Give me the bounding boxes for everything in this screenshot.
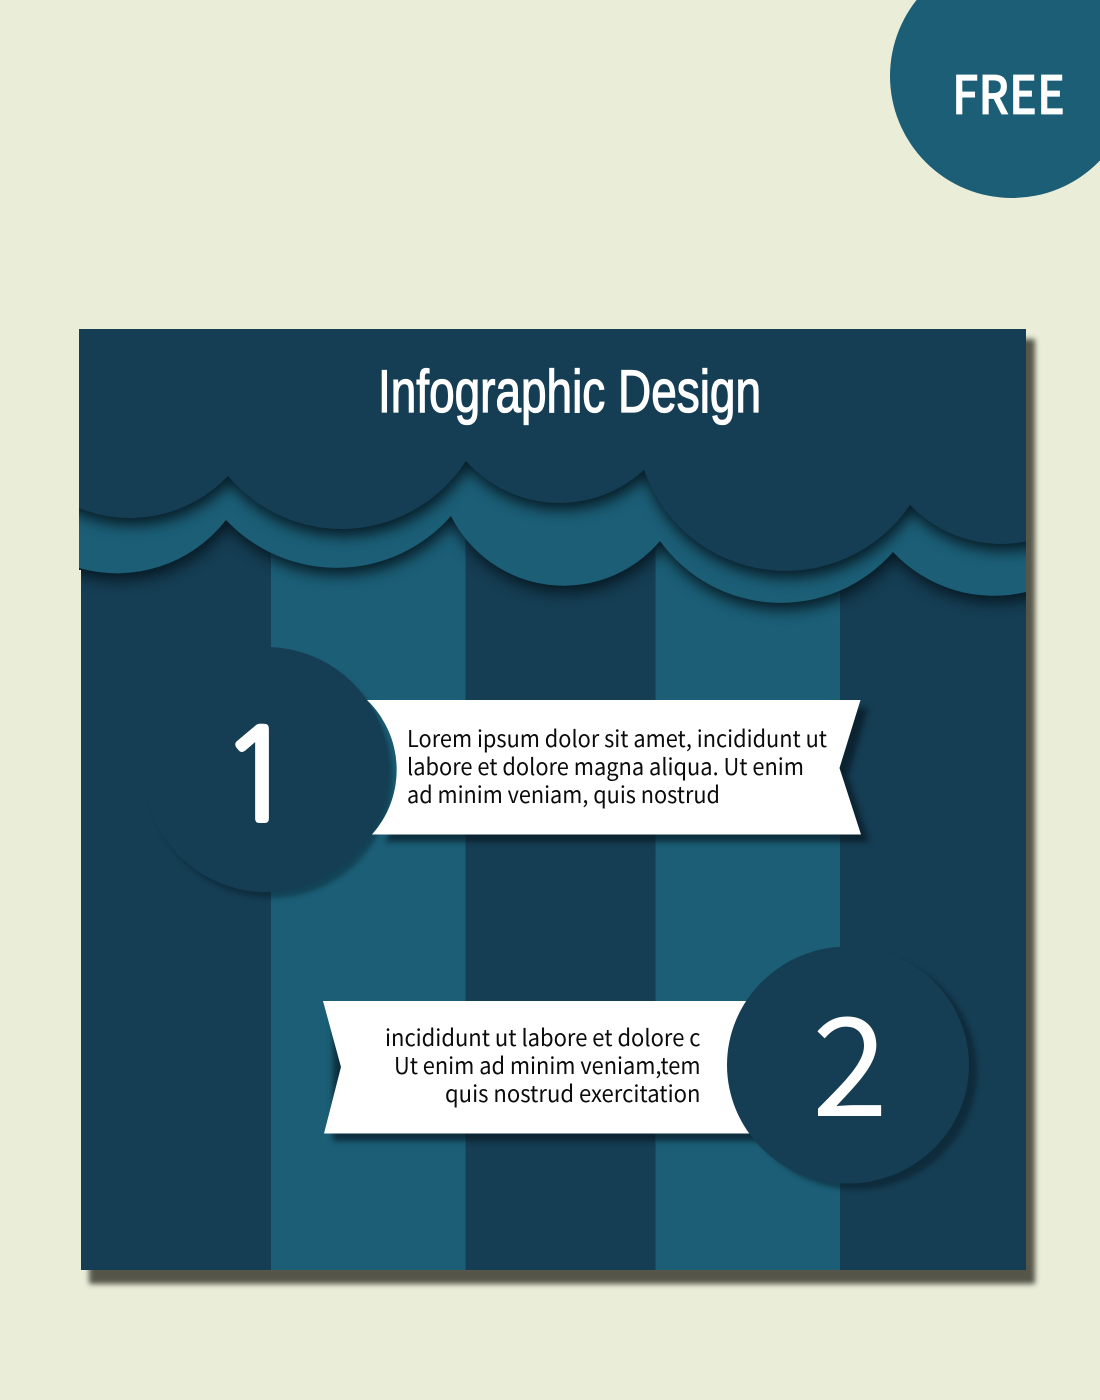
circle 2	[727, 946, 969, 1184]
title: Infographic Design	[378, 358, 761, 425]
ribbon 2 text: Ut enim ad minim veniam,tem	[394, 1047, 700, 1081]
number 2: 2	[812, 958, 888, 1156]
vertical stripes	[79, 516, 1026, 1270]
circle 1	[144, 647, 388, 892]
panel drop shadow	[89, 339, 1035, 1284]
ribbon 1 text: ad minim veniam, quis nostrud	[407, 776, 720, 810]
ribbon 1 text: Lorem ipsum dolor sit amet, incididunt ut	[407, 720, 827, 754]
upper scalloped drape	[60, 329, 1040, 571]
ribbon 1	[367, 700, 861, 834]
number 1: 1	[220, 713, 296, 839]
lower scalloped drape	[79, 466, 1026, 618]
ribbon 2	[323, 1001, 800, 1134]
circle 1 shadow	[149, 654, 393, 898]
circle 2 shadow	[735, 952, 977, 1190]
ribbon 1 text	[407, 720, 827, 810]
step 2	[323, 946, 977, 1190]
ribbon 2 text: incididunt ut labore et dolore c	[385, 1019, 701, 1053]
main panel	[60, 329, 1040, 1270]
ribbon 1 text: labore et dolore magna aliqua. Ut enim	[407, 748, 804, 782]
step 1	[144, 647, 869, 898]
badge: free	[890, 0, 1100, 198]
ribbon 2 text: quis nostrud exercitation	[445, 1075, 700, 1109]
ribbon 2 text	[385, 1019, 701, 1109]
ribbon 1 shadow	[385, 708, 869, 842]
ribbon 2 shadow	[333, 1009, 800, 1141]
badge: free: FREE	[952, 54, 1065, 130]
